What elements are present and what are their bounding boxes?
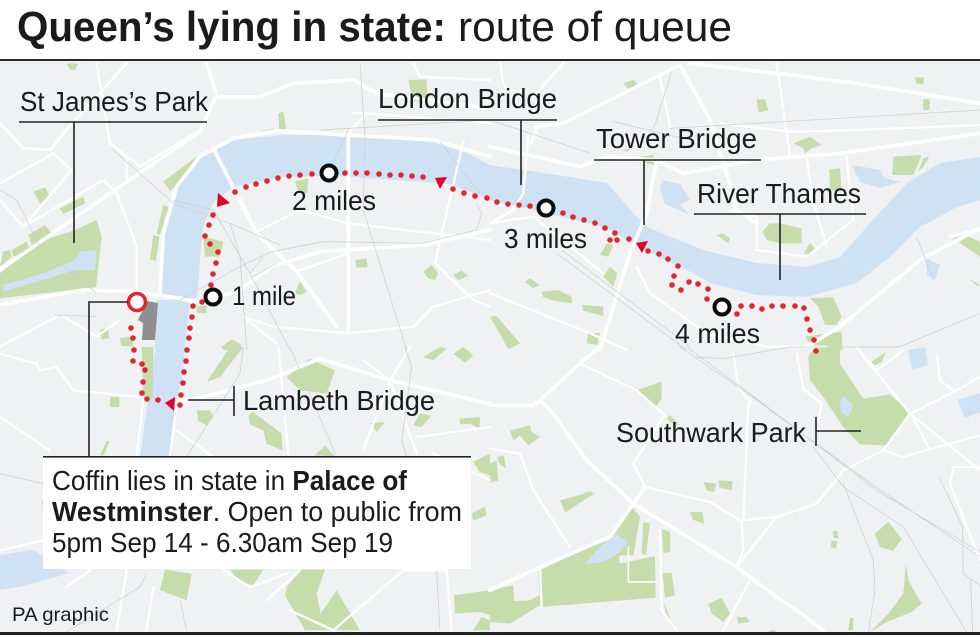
label: Lambeth Bridge: Lambeth Bridge	[243, 385, 435, 416]
Thames docks and other water	[0, 165, 980, 590]
label: River Thames	[694, 178, 866, 280]
mile marker: 2 miles	[292, 166, 376, 216]
callout: Palace of Westminster: 5pm Sep 14 - 6.30am Sep 19	[52, 527, 393, 558]
label: St James's Park	[19, 86, 208, 243]
mile marker: 4 miles	[675, 300, 760, 349]
title: Queen’s lying in state:	[17, 3, 446, 50]
title: route of queue	[458, 3, 732, 50]
label: Tower Bridge	[594, 123, 761, 225]
mile marker: 2 miles: 2 miles	[292, 185, 376, 216]
start marker: Palace of Westminster	[128, 294, 146, 310]
queue route dotted line	[128, 170, 819, 408]
callout: Palace of Westminster: Coffin lies in state in Palace of	[52, 465, 408, 496]
label: St James's Park: St James’s Park	[20, 86, 208, 117]
mile marker: 4 miles: 4 miles	[675, 318, 760, 349]
mile marker: 3 miles	[504, 200, 587, 254]
mile marker: 3 miles: 3 miles	[504, 223, 587, 254]
top rule	[0, 59, 980, 61]
label: Southwark Park: Southwark Park	[616, 417, 806, 448]
mile marker: 1 mile	[206, 281, 296, 311]
river: Thames	[140, 135, 980, 457]
route direction arrows	[165, 177, 648, 411]
credit: PA graphic	[12, 604, 109, 626]
leader line to Palace of Westminster	[89, 302, 128, 457]
label: Tower Bridge: Tower Bridge	[596, 123, 757, 154]
label: River Thames: River Thames	[697, 178, 861, 209]
label: London Bridge	[378, 83, 557, 185]
callout: Palace of Westminster	[43, 456, 471, 569]
callout: Palace of Westminster: Westminster. Open to public from	[52, 496, 462, 527]
mile marker: 1 mile: 1 mile	[232, 281, 296, 311]
label: London Bridge: London Bridge	[378, 83, 557, 114]
Palace of Westminster building	[138, 301, 158, 340]
bottom rule	[0, 632, 980, 635]
